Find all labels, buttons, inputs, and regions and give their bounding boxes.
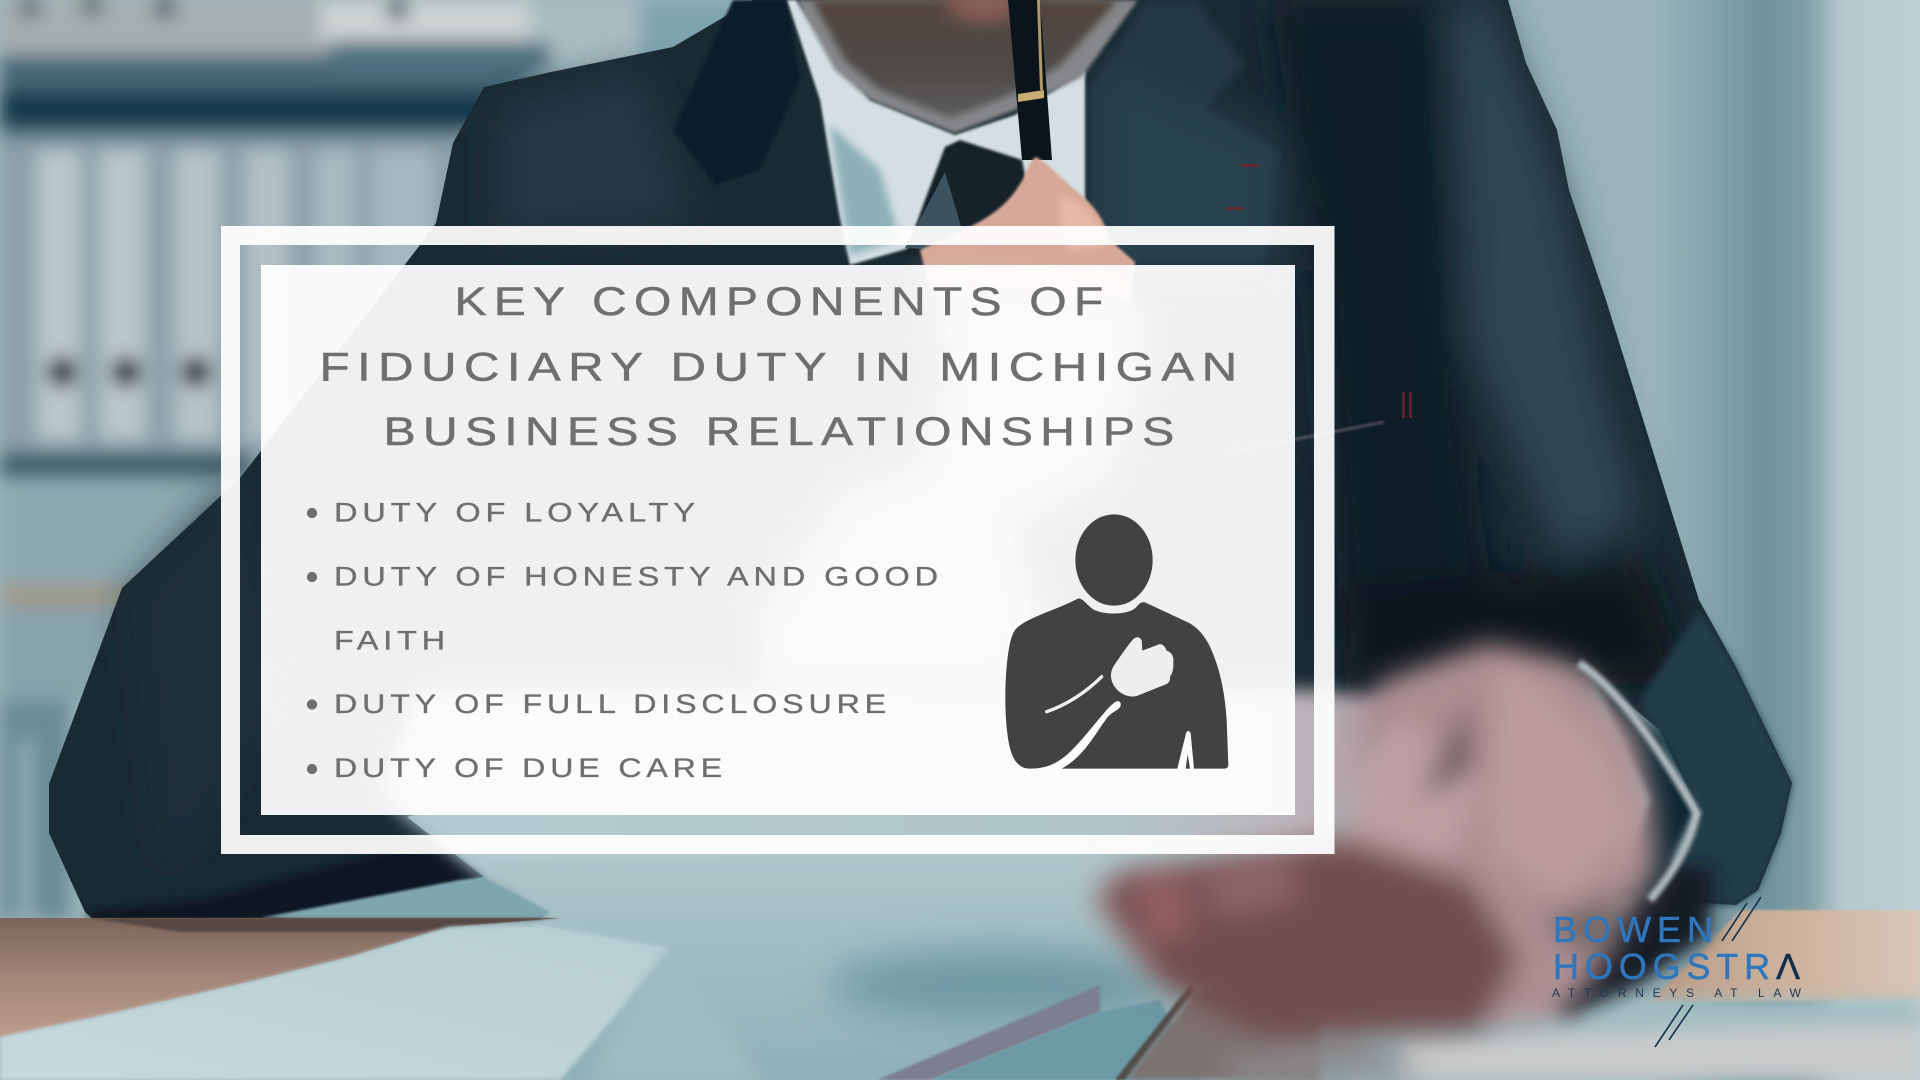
white outer frame [221,226,1334,854]
hand holding pen [920,157,1135,300]
logo: Bowen Hoogstra Attorneys at Law: BOWEN [1553,909,1713,950]
suit jacket [49,0,1792,925]
blurred foreground hand [1090,643,1657,1080]
sheets of paper held up [380,690,1400,880]
grey beard [796,0,1138,133]
panel: key components [261,265,1295,815]
cuff interior [1590,670,1695,900]
dark sleeve shadow under logo [1540,860,1715,1018]
page stack edge [877,985,1320,1080]
paper shadow [830,951,1170,1019]
wristwatch band [1579,663,1697,900]
ghost arm behind translucent panel [759,263,1146,690]
duty of loyalty: DUTY OF LOYALTY [334,498,700,528]
panel background [261,265,1295,815]
duty of honesty and good faith [307,562,943,656]
duty of honesty and good faith: DUTY OF HONESTY AND GOOD [334,562,943,592]
heading: BUSINESS RELATIONSHIPS [384,410,1182,454]
duty of due care: DUTY OF DUE CARE [334,753,727,783]
fountain pen [1008,0,1052,160]
duty of full disclosure: DUTY OF FULL DISCLOSURE [334,689,891,719]
duty of honesty and good faith: FAITH [334,626,450,656]
necktie [905,140,1030,265]
wooden desk right [1650,910,1920,1002]
white shirt collar [787,0,1085,265]
paper under sleeve [260,877,550,920]
right paper [1400,1000,1920,1080]
foreground paper [0,925,670,1080]
heading: FIDUCIARY DUTY IN MICHIGAN [320,346,1244,390]
red lapel stitching [1226,164,1412,418]
heading: KEY COMPONENTS OF [454,280,1110,324]
logo: Bowen Hoogstra Attorneys at Law: ATTORNEYS AT LAW [1552,986,1802,1000]
bullet list of duties [307,498,943,783]
icon: person with hand on heart [1005,514,1228,769]
logo: Bowen Hoogstra Attorneys at Law [1552,897,1802,1047]
logo slashes [1655,897,1761,1047]
logo: Bowen Hoogstra Attorneys at Law: HOOGSTRΛ [1553,946,1800,987]
hand crease [1420,700,1470,800]
office shelves with binders [0,0,800,920]
heading [320,280,1244,454]
wooden desk left [0,918,560,1037]
